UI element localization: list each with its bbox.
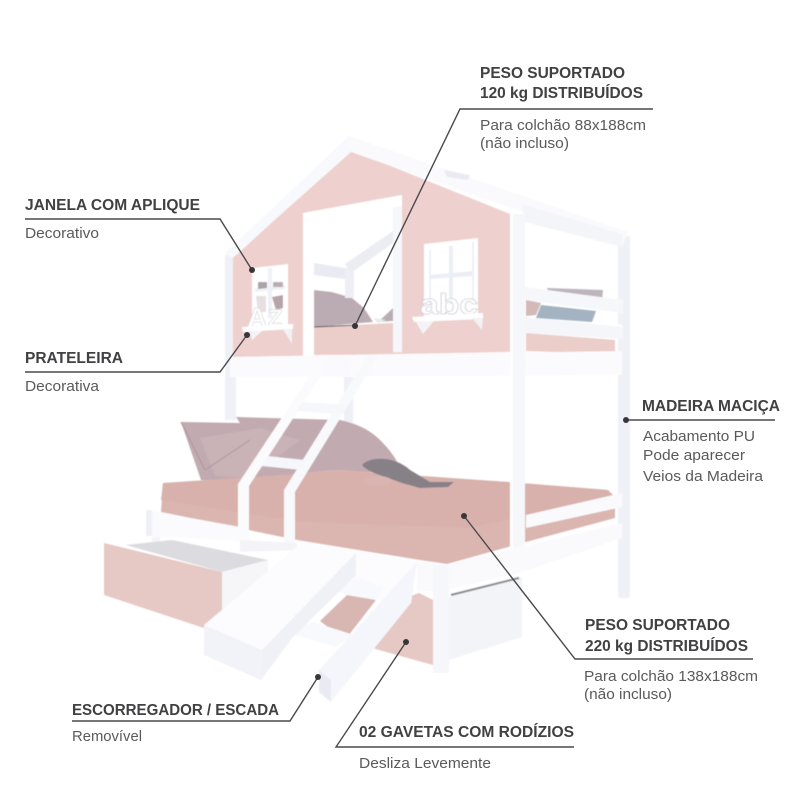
door frame bbox=[303, 195, 402, 356]
callout: peso suportado 220 kg: Para colchão 138x188cm bbox=[584, 668, 758, 685]
callout: peso suportado 220 kg: PESO SUPORTADO bbox=[585, 617, 730, 634]
left window bbox=[252, 264, 288, 330]
left post bbox=[225, 255, 236, 420]
steps bbox=[285, 578, 383, 647]
top bed inner rail and pillows seen through door bbox=[314, 231, 393, 355]
callout: prateleira bbox=[25, 332, 250, 395]
letters applique bbox=[247, 302, 283, 333]
front right post bbox=[510, 214, 525, 554]
callout: peso suportado 220 kg: (não incluso) bbox=[584, 686, 672, 703]
top bed pillows right side bbox=[526, 288, 622, 334]
letters applique: A bbox=[247, 302, 267, 333]
pink behind steps bbox=[320, 595, 376, 640]
callout: escorregador / escada: ESCORREGADOR / ESCADA bbox=[72, 702, 279, 719]
right shelf bbox=[412, 313, 483, 334]
callout: peso suportado 120 kg bbox=[352, 65, 653, 329]
callout: escorregador / escada: Removível bbox=[72, 728, 142, 745]
lower mattress bbox=[161, 470, 615, 564]
lower bed left rail bbox=[146, 510, 300, 553]
slide bbox=[204, 543, 358, 680]
callout: madeira maciça: Veios da Madeira bbox=[643, 468, 764, 485]
callout: peso suportado 120 kg: Para colchão 88x188cm bbox=[480, 117, 646, 134]
callout: madeira maciça: Pode aparecer bbox=[643, 447, 745, 464]
far inner post bbox=[344, 377, 353, 427]
callout: peso suportado 120 kg: PESO SUPORTADO bbox=[480, 65, 625, 82]
callout: madeira maciça: Acabamento PU bbox=[643, 428, 755, 445]
stairs back panel bbox=[330, 551, 417, 603]
upper floor beam bbox=[230, 351, 622, 377]
callout: escorregador / escada bbox=[72, 674, 321, 745]
pillows lower bed bbox=[181, 417, 401, 483]
rear right post bbox=[618, 236, 630, 598]
bunk bed illustration bbox=[104, 136, 630, 702]
callout: madeira maciça bbox=[623, 398, 780, 485]
callout: janela com aplique: Decorativo bbox=[25, 225, 99, 242]
ladder bbox=[238, 355, 379, 543]
top bed pink rail bbox=[526, 333, 615, 354]
right drawer bbox=[372, 577, 522, 665]
pink house wall bbox=[233, 150, 510, 357]
roof bbox=[225, 136, 628, 258]
callout: janela com aplique: JANELA COM APLIQUE bbox=[25, 197, 200, 214]
callout: prateleira: PRATELEIRA bbox=[25, 350, 123, 367]
guard rails bbox=[525, 287, 623, 339]
callout: madeira maciça: MADEIRA MACIÇA bbox=[642, 398, 780, 415]
abc letters: abc bbox=[420, 289, 478, 321]
callout: prateleira: Decorativa bbox=[25, 378, 100, 395]
lower bed front rails bbox=[417, 493, 622, 592]
right window bbox=[424, 238, 478, 320]
callout: 02 gavetas com rodízios bbox=[336, 639, 574, 772]
callout: peso suportado 220 kg bbox=[461, 513, 758, 703]
callout: peso suportado 120 kg: (não incluso) bbox=[480, 135, 569, 152]
stair stringer bbox=[319, 562, 417, 702]
callout: 02 gavetas com rodízios: Desliza Levemente bbox=[359, 755, 491, 772]
callout: 02 gavetas com rodízios: 02 GAVETAS COM RODÍZIOS bbox=[359, 722, 574, 741]
left shelf bbox=[242, 324, 293, 344]
callout: peso suportado 220 kg: 220 kg DISTRIBUÍDOS bbox=[585, 636, 748, 655]
corner post bbox=[433, 565, 449, 673]
door opening bbox=[303, 195, 402, 356]
letters applique: Z bbox=[268, 305, 283, 332]
plush whale toy bbox=[362, 459, 454, 488]
callout: peso suportado 120 kg: 120 kg DISTRIBUÍDOS bbox=[480, 83, 643, 102]
callout: janela com aplique bbox=[25, 197, 255, 273]
left drawer bbox=[104, 540, 268, 628]
